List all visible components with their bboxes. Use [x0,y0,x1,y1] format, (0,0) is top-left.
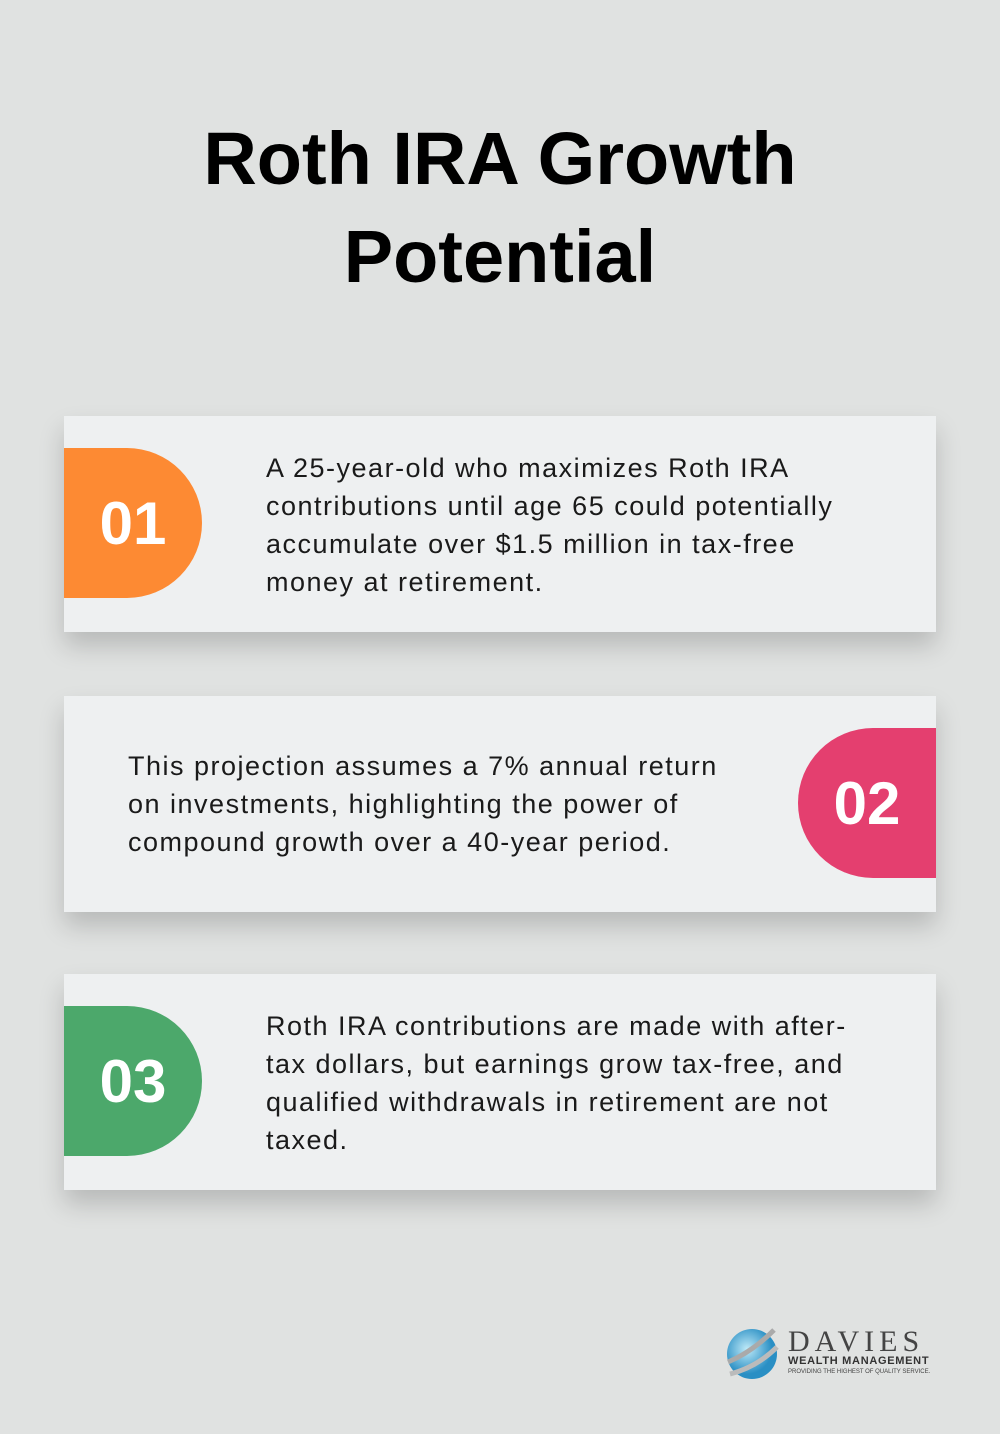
badge 02 [798,728,936,878]
badge 01: 01 [100,490,166,556]
title [203,117,797,298]
logo [727,1325,930,1379]
text 2: compound growth over a 40-year period. [128,827,671,857]
card 3 [64,974,936,1190]
badge 03 [64,1006,202,1156]
logo: PROVIDING THE HIGHEST OF QUALITY SERVICE. [788,1369,930,1375]
text 3: tax dollars, but earnings grow tax-free, and [266,1049,844,1079]
icon: globe [727,1328,779,1379]
badge 01 [64,448,202,598]
text 1: contributions until age 65 could potentially [266,491,833,521]
badge 02: 02 [834,770,900,836]
text 2: This projection assumes a 7% annual return [128,751,718,781]
text 1: A 25-year-old who maximizes Roth IRA [266,453,790,483]
text 3: qualified withdrawals in retirement are not [266,1087,829,1117]
logo: WEALTH MANAGEMENT [788,1355,929,1367]
text 1: money at retirement. [266,567,544,597]
card 2 [64,696,936,912]
text 2 [128,751,718,857]
text 3: taxed. [266,1125,349,1155]
logo text: DAVIES [788,1325,924,1358]
title: Roth IRA Growth [203,117,797,200]
text 1: accumulate over $1.5 million in tax-free [266,529,796,559]
card 1 [64,416,936,632]
text 3: Roth IRA contributions are made with after- [266,1011,847,1041]
title: Potential [344,215,656,298]
text 2: on investments, highlighting the power of [128,789,679,819]
badge 03: 03 [100,1048,166,1114]
text 3 [266,1011,847,1155]
text 1 [266,453,833,597]
